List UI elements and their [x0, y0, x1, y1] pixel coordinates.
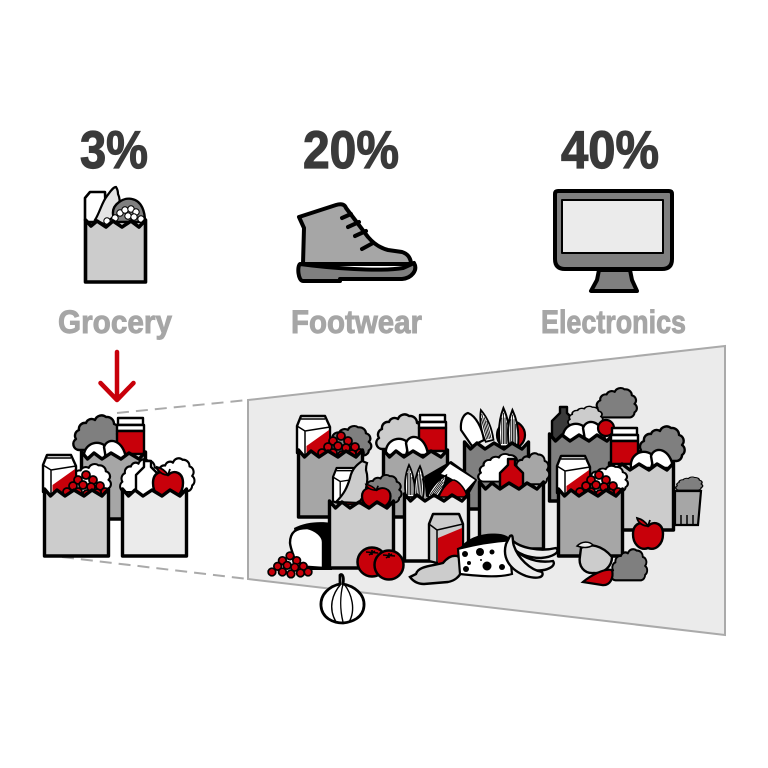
small grocery group	[43, 415, 194, 556]
bag: far back with dark bottle	[550, 388, 637, 501]
cheese	[458, 534, 512, 576]
bag: back left carton and berries	[297, 416, 371, 517]
stat: 20%: 20%	[303, 121, 399, 180]
pear	[410, 556, 462, 584]
panel: magnified groceries	[248, 346, 725, 635]
left bag	[43, 455, 111, 556]
stat: 40%: 40%	[561, 121, 659, 180]
stat: 3%: 3%	[80, 121, 148, 180]
bananas	[505, 535, 558, 578]
icon: grocery bag	[85, 187, 146, 282]
bag: back corn and bottle	[461, 408, 528, 509]
back bag	[73, 415, 146, 519]
apple, radish and leaf	[577, 542, 647, 585]
bread loaf	[290, 522, 332, 570]
label: Electronics: Electronics	[541, 304, 686, 340]
red apple	[633, 518, 663, 549]
ground berries	[268, 552, 312, 578]
onion	[321, 575, 364, 623]
big grocery pile	[268, 388, 703, 623]
basket	[675, 477, 703, 525]
bag: far right red jar	[610, 426, 685, 530]
icon: boot	[298, 204, 415, 281]
label: Footwear: Footwear	[291, 304, 422, 340]
bag: centre red bottle	[478, 453, 549, 549]
bag: right carton and berries	[557, 456, 628, 556]
small carton	[429, 514, 463, 563]
label: Grocery: Grocery	[58, 304, 172, 340]
icon: monitor	[555, 191, 672, 291]
bag: back centre broccoli and red jar	[376, 414, 448, 517]
bag: front corn and bread	[404, 462, 476, 561]
arrow: down to grocery bags	[100, 352, 134, 400]
right bag	[120, 458, 194, 556]
bag: front pear, apple, broccoli	[330, 461, 402, 568]
zoom guide lines	[62, 400, 248, 579]
tomatoes	[358, 548, 404, 580]
